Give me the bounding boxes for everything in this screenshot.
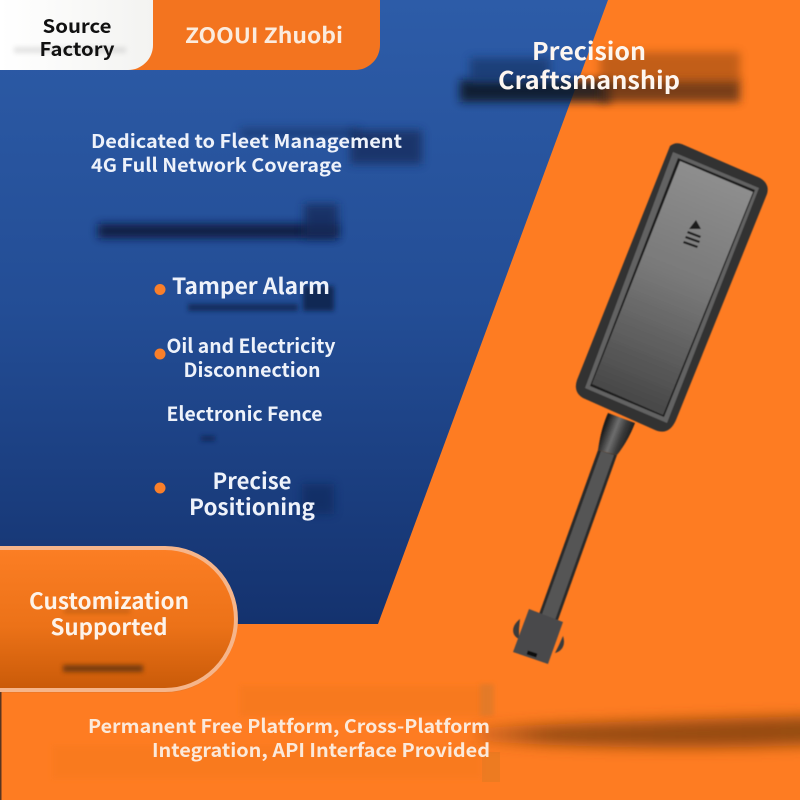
heading: Precision Craftsmanship (498, 32, 680, 96)
left edge line (0, 690, 2, 800)
ground shadow (478, 716, 800, 748)
header tab: ZOOUI Zhuobi (0, 0, 380, 70)
fleet management text: 4G Full Network Coverage (91, 151, 342, 178)
product: GPS tracker device (513, 143, 768, 664)
feature: Electronic Fence: Electronic Fence (166, 398, 322, 427)
blurred background smudges (52, 52, 740, 782)
device face (592, 161, 753, 415)
fleet management text (91, 127, 402, 178)
feature: Oil and Electricity Disconnection: Oil and Electricity (166, 330, 336, 359)
platform text (88, 712, 490, 763)
heading: Precision Craftsmanship: Craftsmanship (498, 61, 680, 96)
callout badge: Customization Supported: Customization (29, 584, 189, 616)
platform text: Permanent Free Platform, Cross-Platform (88, 712, 490, 739)
feature: Tamper Alarm: Tamper Alarm (172, 269, 330, 301)
device bevel (585, 152, 759, 423)
fleet management text: Dedicated to Fleet Management (91, 127, 402, 154)
flat cable (538, 450, 617, 620)
feature: Precise Positioning: Precise (212, 464, 292, 496)
blue diagonal panel (0, 0, 608, 624)
connector plug (513, 609, 563, 664)
header tab: Source Factory (0, 0, 153, 70)
feature: Oil and Electricity Disconnection: Disconnection (184, 354, 320, 383)
header tab: ZOOUI Zhuobi: ZOOUI Zhuobi (185, 20, 343, 50)
device body (576, 143, 768, 432)
plug slot (527, 651, 537, 657)
feature: Precise Positioning: Positioning (189, 490, 315, 522)
header tab: Source Factory: Source (42, 12, 112, 39)
device groove (590, 158, 755, 417)
platform text: Integration, API Interface Provided (152, 736, 490, 763)
callout badge: Customization Supported: Supported (50, 610, 168, 642)
heading: Precision Craftsmanship: Precision (532, 32, 646, 67)
cable highlight (541, 451, 614, 620)
eject mark (683, 220, 701, 248)
feature: Precise Positioning (154, 464, 315, 522)
header tab: Source Factory: Factory (40, 35, 115, 62)
callout badge: Customization Supported (0, 548, 236, 692)
feature: Oil and Electricity Disconnection (154, 330, 336, 383)
connector clips (513, 619, 564, 653)
cable boot (598, 413, 635, 455)
